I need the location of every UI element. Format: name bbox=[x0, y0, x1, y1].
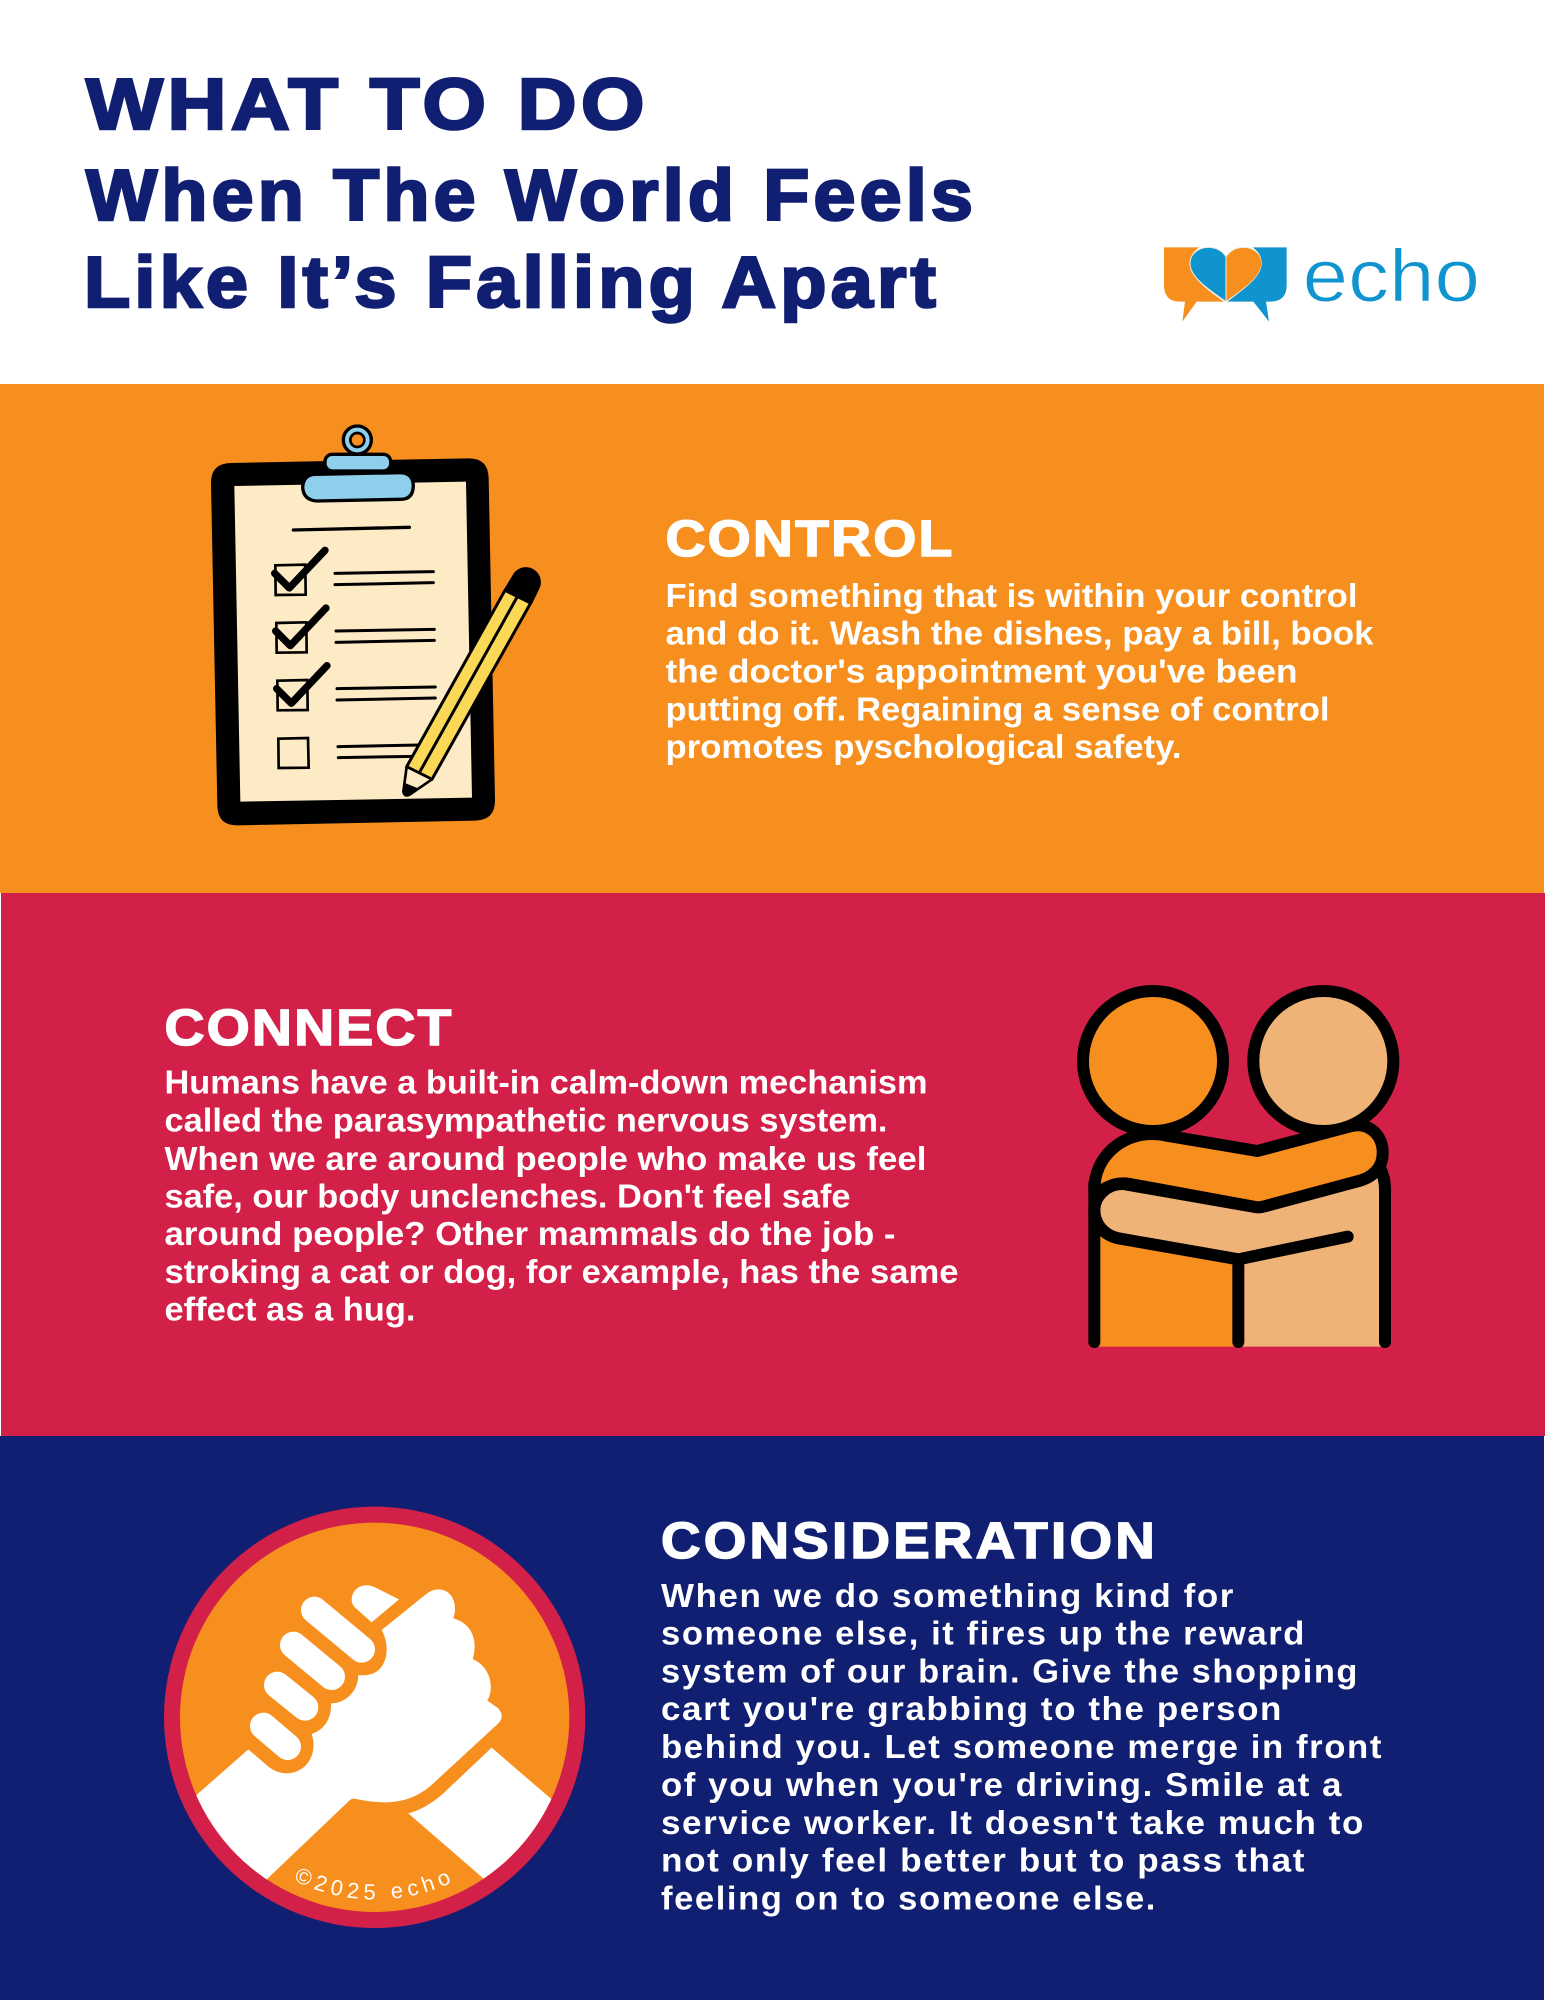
text block: control: putting off. Regaining a sense of control bbox=[666, 690, 1330, 728]
text block: consideration: feeling on to someone else. bbox=[661, 1880, 1157, 1916]
text block: consideration: cart you're grabbing to the person bbox=[661, 1690, 1283, 1727]
text block: connect: stroking a cat or dog, for example, has the same bbox=[164, 1253, 958, 1290]
copyright text: ©2025 echo bbox=[296, 1869, 450, 1900]
text block: connect: Humans have a built-in calm-down mechanism bbox=[164, 1064, 928, 1100]
text block: consideration bbox=[661, 1577, 1383, 1916]
text block: connect: around people? Other mammals do the job - bbox=[164, 1215, 896, 1252]
heading: consideration: CONSIDERATION bbox=[661, 1512, 1158, 1569]
text block: consideration: of you when you're driving. Smile at a bbox=[661, 1766, 1343, 1803]
text block: connect: called the parasympathetic nervous system. bbox=[164, 1102, 888, 1138]
logo: echo: echo bbox=[1303, 234, 1480, 318]
heading: control: CONTROL bbox=[666, 510, 954, 567]
title: When The World Feels bbox=[86, 156, 977, 236]
text block: consideration: service worker. It doesn't take much to bbox=[661, 1804, 1365, 1841]
title bbox=[84, 65, 977, 323]
logo: echo bbox=[1164, 234, 1480, 322]
text block: connect: effect as a hug. bbox=[164, 1290, 416, 1328]
text block: connect: When we are around people who make us feel bbox=[164, 1140, 926, 1177]
heading: connect: CONNECT bbox=[164, 999, 454, 1056]
text block: connect bbox=[164, 1064, 958, 1328]
text block: consideration: behind you. Let someone merge in front bbox=[661, 1728, 1383, 1765]
panel: consideration bbox=[0, 1436, 1544, 2000]
panel: control bbox=[0, 384, 1544, 893]
text block: consideration: someone else, it fires up the reward bbox=[661, 1614, 1306, 1652]
icon: clasped hands badge bbox=[164, 1506, 586, 1928]
icon: clipboard with checklist and pencil bbox=[211, 426, 541, 825]
title: WHAT TO DO bbox=[86, 65, 649, 145]
text block: consideration: not only feel better but to pass that bbox=[661, 1842, 1306, 1878]
text block: control: promotes pyschological safety. bbox=[666, 728, 1182, 765]
text block: connect: safe, our body unclenches. Don't feel safe bbox=[164, 1178, 850, 1214]
text block: consideration: system of our brain. Give the shopping bbox=[661, 1652, 1359, 1690]
text block: control: the doctor's appointment you've been bbox=[666, 652, 1298, 690]
title: Like It’s Falling Apart bbox=[84, 243, 940, 323]
panel: connect bbox=[1, 893, 1545, 1436]
text block: control: and do it. Wash the dishes, pay a bill, book bbox=[666, 614, 1374, 652]
text block: control: Find something that is within your control bbox=[666, 577, 1358, 614]
text block: consideration: When we do something kind for bbox=[661, 1577, 1235, 1614]
text block: control bbox=[666, 577, 1374, 765]
icon: two people hugging bbox=[1083, 991, 1393, 1347]
